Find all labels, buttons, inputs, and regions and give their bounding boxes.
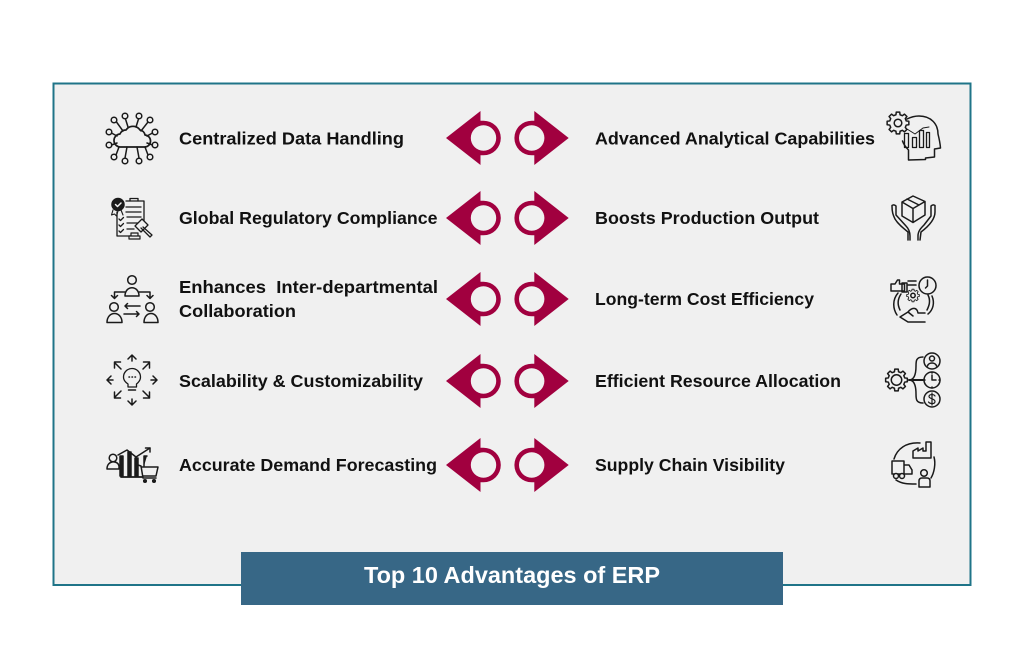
icon: cloud network [106,113,158,164]
item: Boosts Production Output [595,196,935,240]
arrow pairs [446,111,569,492]
item: Supply Chain Visibility [595,442,935,487]
arrows: row 1 [446,111,569,165]
label: Boosts Production Output [595,208,819,228]
label: Advanced Analytical Capabilities [595,128,875,148]
icon: bulb with arrows [107,355,157,405]
icon: clipboard and gavel [112,198,152,239]
arrows: row 5 [446,438,569,492]
item: Advanced Analytical Capabilities [595,112,940,160]
label: Global Regulatory Compliance [179,208,438,228]
icon: thumb, clock, gear and hand [891,277,936,322]
item: Global Regulatory Compliance [112,198,438,239]
title banner [241,552,783,605]
icon: chart and cart [107,448,158,482]
arrows: row 3 [446,272,569,326]
label: Long-term Cost Efficiency [595,289,814,309]
icon: collaborating people [107,276,158,322]
icon: truck, factory and person [892,442,935,487]
icon: hands holding a box [892,196,935,240]
title: Top 10 Advantages of ERP [364,562,660,588]
label: Efficient Resource Allocation [595,371,841,391]
panel: main background [54,84,970,585]
icon: head with gear and bars [887,112,940,160]
item: Efficient Resource Allocation [595,353,940,407]
item: Scalability & Customizability [107,355,423,405]
item: Centralized Data Handling [106,113,404,164]
item: Accurate Demand Forecasting [107,448,437,482]
label: Scalability & Customizability [179,371,423,391]
label: Enhances Inter-departmental [179,277,438,297]
arrows: row 2 [446,191,569,245]
label: Accurate Demand Forecasting [179,455,437,475]
label: Centralized Data Handling [179,128,404,148]
label: Supply Chain Visibility [595,455,785,475]
icon: gear to people, time and money [886,353,940,407]
label continuation: Collaboration [179,301,296,321]
item: Enhances Inter-departmental Collaboration [107,276,438,322]
item: Long-term Cost Efficiency [595,277,936,322]
arrows: row 4 [446,354,569,408]
